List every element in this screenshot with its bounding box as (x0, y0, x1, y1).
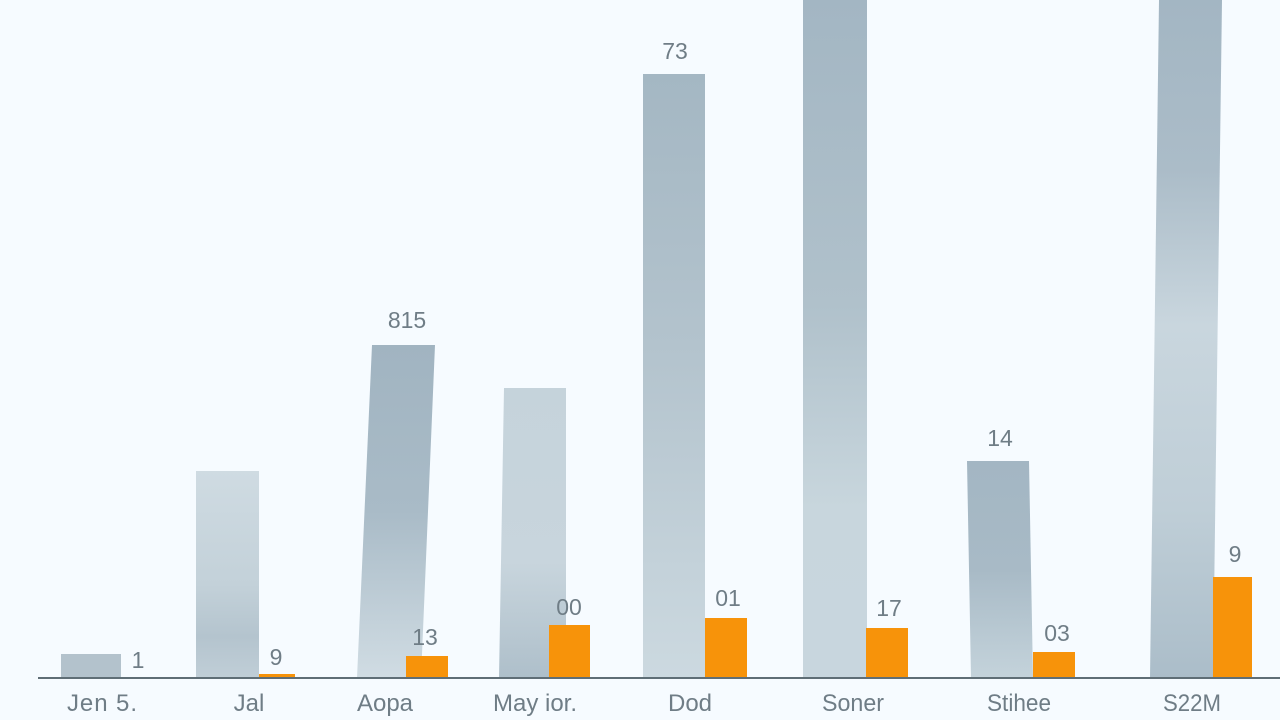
month label: Dod: Dod (668, 690, 712, 717)
month label: Aopa: Aopa (357, 690, 414, 717)
value: Soner accent: 17 (876, 595, 902, 621)
accent bar: May (549, 625, 590, 678)
value: Aopa primary: 815 (388, 307, 426, 333)
value: S22M accent: 9 (1229, 541, 1241, 567)
primary bar: Jul (196, 471, 259, 678)
axis line (38, 677, 1280, 679)
primary bar: May (499, 388, 566, 678)
primary bar: Jan (61, 654, 121, 678)
value: Dod accent: 01 (715, 585, 741, 611)
month label: Jul: Jal (234, 690, 264, 717)
group: Jan (61, 647, 144, 717)
primary bar: Soner (803, 0, 867, 678)
value: Stihee primary: 14 (987, 425, 1013, 451)
group: Jul (196, 471, 295, 717)
primary bar: Aopa (357, 345, 435, 678)
value: May accent: 00 (556, 594, 582, 620)
value: Aopa accent: 13 (412, 624, 438, 650)
group: Stihee (967, 425, 1075, 717)
group: Aopa (357, 307, 448, 717)
month label: Jan: Jen 5. (67, 690, 137, 717)
group: Dod (643, 38, 747, 717)
primary bar: Dod (643, 74, 705, 678)
value: Stihee accent: 03 (1044, 620, 1070, 646)
accent bar: Jul (259, 674, 295, 678)
value: Dod primary: 73 (662, 38, 688, 64)
group: Soner (803, 0, 908, 717)
month label: Stihee: Stihee (987, 690, 1051, 717)
accent bar: Aopa (406, 656, 448, 678)
accent bar: Stihee (1033, 652, 1075, 678)
value: Jan: 1 (132, 647, 144, 673)
month label: May: May ior. (493, 690, 577, 717)
accent bar: Soner (866, 628, 908, 678)
month label: S22M: S22M (1163, 690, 1221, 717)
value: Jul: 9 (270, 644, 282, 670)
primary bar: S22M (1150, 0, 1222, 678)
accent bar: S22M (1213, 577, 1252, 678)
accent bar: Dod (705, 618, 747, 678)
group: May (493, 388, 590, 717)
primary bar: Stihee (967, 461, 1033, 678)
group: S22M (1150, 0, 1252, 717)
month label: Soner: Soner (822, 690, 884, 717)
